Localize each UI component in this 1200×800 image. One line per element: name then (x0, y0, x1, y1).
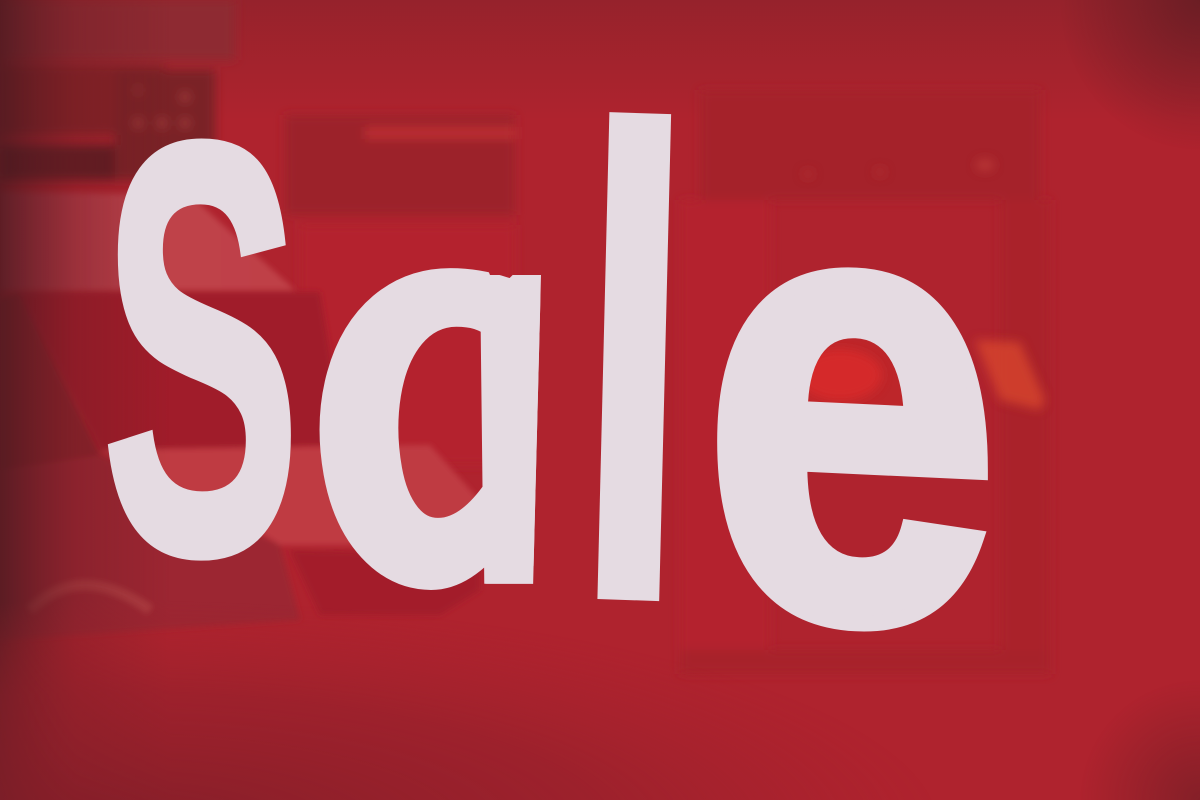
letter e: e (703, 36, 999, 759)
reflection: white van roof and windscreen (0, 192, 520, 640)
letter l: l (562, 0, 706, 745)
sign lettering: Sale (108, 112, 988, 632)
letter a: a (245, 35, 633, 695)
reflection: orange light glow (798, 159, 1045, 410)
letter S: S (101, 19, 301, 677)
reflection: dark building top left (0, 0, 235, 180)
reflection: shop window panel right (680, 90, 1050, 674)
reflection: building panel centre (285, 115, 515, 465)
